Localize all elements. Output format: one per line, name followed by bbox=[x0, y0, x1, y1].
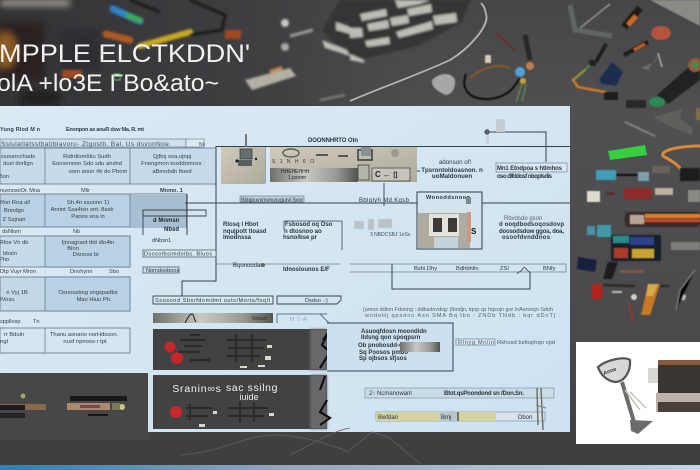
bottom bar two: Dbon bbox=[518, 415, 532, 421]
table row three: Ijnnagrant ttid dlo4tn bbox=[62, 240, 114, 246]
table row one bbox=[0, 148, 216, 184]
nested tabs centre left: Nbsd bbox=[164, 227, 179, 233]
nested tabs centre left bbox=[143, 218, 216, 274]
label strip centre: Bblqlyh Md.Kqsb bbox=[359, 198, 410, 204]
gradient bar row bbox=[153, 313, 330, 324]
table row one: Fnengmon toxddomnxx : bbox=[141, 161, 205, 167]
text box upper right: oso dlfddosf nboplsdis bbox=[497, 174, 553, 180]
callout flow labels: Idnoslounos E/F bbox=[283, 267, 330, 273]
callout outline bbox=[284, 221, 342, 250]
outlined dark box right of strip bbox=[327, 323, 453, 371]
dark image strip one bbox=[153, 329, 335, 370]
text block right lower: doosodsdow ggoa, doa, bbox=[499, 229, 564, 235]
labels row on middle bar: Bdhbhlln bbox=[456, 266, 479, 272]
label row next to box bbox=[456, 339, 555, 346]
blurred components top left bbox=[0, 0, 100, 106]
small image block right of centre: S bbox=[471, 227, 477, 236]
table row three: bbsln bbox=[3, 251, 17, 257]
grey icon cluster centre bbox=[354, 219, 392, 230]
left table: Tn bbox=[33, 319, 40, 325]
outlined dark box right of strip: Asuoqfdosn moondidn bbox=[361, 329, 427, 335]
small pin icon at top bbox=[485, 119, 505, 144]
small image block right of centre bbox=[417, 192, 482, 249]
table row five: rr Bduln bbox=[4, 332, 24, 338]
table captions: Yung Rlod M n bbox=[0, 127, 41, 133]
device panel two: HHEHEHHH bbox=[281, 169, 310, 175]
table row three: Rfoe Vn db bbox=[0, 240, 29, 246]
pliers tool on bars bbox=[536, 388, 546, 430]
left table: Nb bbox=[73, 229, 80, 235]
table row one: Qjftoj osa,ojnpj bbox=[153, 154, 191, 160]
strip three bbox=[0, 269, 119, 275]
flow box row: Ssosond Sbsrfdomdmt outs/Morts/fnqlt bbox=[155, 298, 270, 304]
label callouts: Imodnssa bbox=[223, 235, 252, 241]
flow box row: Dsdso .-) bbox=[305, 298, 328, 304]
text two lines lower: (amos ddton Fdonng : ddbsdnvdvg: (lbndjn, tqop qs hqsojn gor /nAsnoojn Sdoh bbox=[363, 307, 553, 313]
bottom-left small chips bbox=[0, 394, 127, 418]
table row two: Panos sna in bbox=[71, 214, 105, 220]
outlined dark box right of strip: Ob pnobosdd-chn bbox=[358, 343, 410, 349]
text two lines lower bbox=[363, 307, 555, 319]
label callouts: Fsbosod oq Oso bbox=[285, 222, 333, 228]
device panel two: S 1 N H 6 O bbox=[272, 159, 315, 165]
table row one: ssounnchads bbox=[1, 154, 35, 160]
left table: sppllosp bbox=[0, 319, 21, 325]
labels row on middle bar: ZSI bbox=[500, 266, 509, 272]
connector lines bbox=[143, 132, 570, 296]
green accent in title bbox=[114, 74, 120, 80]
label row next to box: Rkhosd bsfoq/nqn vpd bbox=[497, 340, 555, 346]
caption under cluster: 3 NBDCSBJ 1oSs bbox=[370, 232, 411, 238]
left table: Ns bbox=[199, 142, 206, 148]
callout flow labels: Bqonoodan bbox=[233, 263, 264, 269]
white photo panel bbox=[576, 342, 700, 444]
labels row on middle bar bbox=[414, 266, 556, 274]
table row five: nusf npnoss-r tpt bbox=[63, 339, 107, 345]
label callouts: hsno/bse pr bbox=[283, 235, 318, 241]
labels row on middle bar: BNfy bbox=[543, 266, 556, 272]
wires and connectors bbox=[464, 33, 534, 102]
strip three: Dnohynn bbox=[70, 269, 92, 275]
dark image strip two: sac ssilng bbox=[226, 382, 278, 394]
title: olA +lo3E ΓBo&ato~ bbox=[0, 70, 219, 97]
table row one: dusl dorllgn bbox=[3, 161, 33, 167]
bottom bar one: Btot.qsPnondond sn /Don.Sn. bbox=[444, 391, 524, 397]
tools and parts top right bbox=[570, 0, 700, 136]
strip one: nuxnosoOr. Mna bbox=[0, 188, 41, 194]
text block middle right: uoMaldonuen bbox=[432, 173, 472, 180]
flow box row bbox=[153, 296, 341, 304]
title bbox=[0, 40, 250, 97]
table row two: Anrint Ssa4tsn ont. 8ask bbox=[51, 207, 114, 213]
table row five: Thanu asnano norHdsson. bbox=[50, 332, 119, 338]
gradient bar row: Nonsd bbox=[252, 316, 267, 322]
text box upper right bbox=[496, 163, 567, 180]
callout flow labels bbox=[232, 263, 330, 273]
strip one: Mlir bbox=[81, 188, 90, 194]
text block right lower: d ooqdbodsoqosdovp bbox=[499, 222, 564, 228]
faint lines on the lower background bbox=[180, 428, 422, 465]
bottom bar one: 2↑ Ncmanowanl bbox=[369, 391, 412, 397]
text block right lower: Rbvdsdo gson bbox=[504, 216, 542, 222]
left table: Sslulatlatsstbatiblavoru- Ztgostb. Bal. Us dsvonNoe. bbox=[1, 141, 171, 148]
table row three: Dsnoos br bbox=[73, 252, 99, 258]
guitar pick shape bbox=[432, 74, 455, 95]
label callouts bbox=[223, 222, 333, 241]
label top centre: DOONNHRTO Otn bbox=[308, 138, 358, 144]
title: MPPLE ELCTKDDN' bbox=[0, 40, 250, 68]
gradient bar row: H ☉ A bbox=[290, 316, 307, 323]
white cable bbox=[350, 3, 487, 101]
table captions: Enonpon as anuR dsw Ma, R. mt bbox=[66, 127, 144, 133]
text box upper right: Mn1 Etodpoa s htlmhos bbox=[497, 166, 563, 172]
table row two bbox=[0, 194, 186, 227]
table row two: Sh.4n ssunnn 1) bbox=[67, 200, 109, 206]
green usb stick bbox=[608, 145, 647, 160]
label callouts: nqujpott tloasd bbox=[223, 229, 267, 235]
strip one: Mnmo. 1 bbox=[160, 188, 183, 194]
small image block right of centre: Wonoddsnoon bbox=[426, 195, 471, 201]
label callouts: n dtosnoo ao bbox=[284, 229, 322, 235]
strip three: Dtp Vuyr Mron bbox=[0, 269, 36, 275]
nested tabs centre left: Dsosolbsimdoibs. Bluos bbox=[144, 252, 212, 258]
table row four: Osnoosbng sngspadbs bbox=[58, 290, 118, 296]
outlined dark box right of strip: Sp ojbsos sfjsos bbox=[359, 356, 407, 362]
dark image strip two bbox=[153, 375, 330, 429]
text block middle right: Tpsrontoldoasnon. n bbox=[421, 167, 483, 174]
bottom bar two: Bwfdan bbox=[378, 415, 398, 421]
dark image strip two: Sranin∞s bbox=[172, 383, 222, 395]
label callouts: Rlosq l Hbot bbox=[223, 222, 258, 228]
text block right lower bbox=[499, 216, 564, 241]
colourful cables top left bbox=[62, 0, 345, 100]
table row five: ngl bbox=[0, 339, 8, 345]
bottom colour strip bbox=[0, 465, 700, 470]
strip three: Sbo bbox=[109, 269, 119, 275]
outlined dark box right of strip: Ildsng qon spoqpsrn bbox=[361, 335, 421, 341]
text block right lower: osoofdvnddnos bbox=[502, 235, 551, 241]
bottom bar two: Bmj bbox=[441, 415, 451, 421]
labels row on middle bar: Bshi.Dhy bbox=[414, 266, 437, 272]
device panel two: C ← ▯ bbox=[375, 170, 398, 179]
device panel two: 1 psrom bbox=[288, 175, 306, 181]
bottom bar one bbox=[365, 388, 554, 398]
device panel two bbox=[270, 147, 417, 182]
table row two: Bnndgn bbox=[4, 208, 24, 214]
circuit photo bbox=[648, 360, 700, 412]
nested tabs centre left: d Mnmsn bbox=[153, 218, 180, 224]
nested tabs centre left: dNbsn1 bbox=[152, 238, 171, 244]
strip two: dsNlom bbox=[2, 229, 21, 235]
table row five bbox=[0, 328, 130, 353]
nested tabs centre left: Nomdooboos bbox=[146, 268, 179, 274]
table row one: Eonsenoon Sdo sdu anshd bbox=[52, 161, 122, 167]
device panel one bbox=[221, 134, 265, 184]
label strip centre bbox=[240, 196, 410, 204]
main light-blue panel bbox=[0, 40, 570, 432]
text two lines lower: wndoHj qpsdoo Asn SMA Bq tbo : ZNDb TNdb : bqr dDoTj bbox=[364, 313, 555, 319]
magnifier tool: Anne bbox=[603, 367, 617, 377]
text block middle right: adonson of! bbox=[439, 159, 471, 166]
orange cable bbox=[663, 146, 700, 172]
table captions bbox=[0, 127, 144, 133]
table row one: Ridrdiom6tiu Sudh bbox=[63, 154, 111, 160]
table row three: Binn bbox=[67, 246, 79, 252]
left table bbox=[0, 139, 216, 353]
label row next to box: Rlnyg Mnlin bbox=[458, 340, 494, 346]
table row one: oom anun #b do Pbom bbox=[69, 169, 127, 175]
table row two: Z Ssjnan bbox=[3, 217, 25, 223]
keyboard-like module bbox=[322, 0, 470, 63]
table row four: Mao Hiuu Ph. bbox=[76, 297, 112, 303]
table row three bbox=[0, 236, 130, 267]
strip one bbox=[0, 188, 183, 194]
dark image strip two: iuide bbox=[239, 392, 259, 402]
table row one: aBmobdn ftoed bbox=[152, 169, 192, 175]
small electronic parts right bbox=[577, 166, 700, 321]
table row four bbox=[0, 277, 130, 311]
bottom bar two bbox=[376, 412, 545, 421]
outlined dark box right of strip: Sq Poosos pmdo bbox=[359, 350, 408, 356]
text block middle right bbox=[421, 159, 483, 180]
label strip centre: Bblqpuvvmonusvgurvl Svor bbox=[241, 198, 303, 204]
table row four: n Vyj 1B bbox=[6, 290, 28, 296]
